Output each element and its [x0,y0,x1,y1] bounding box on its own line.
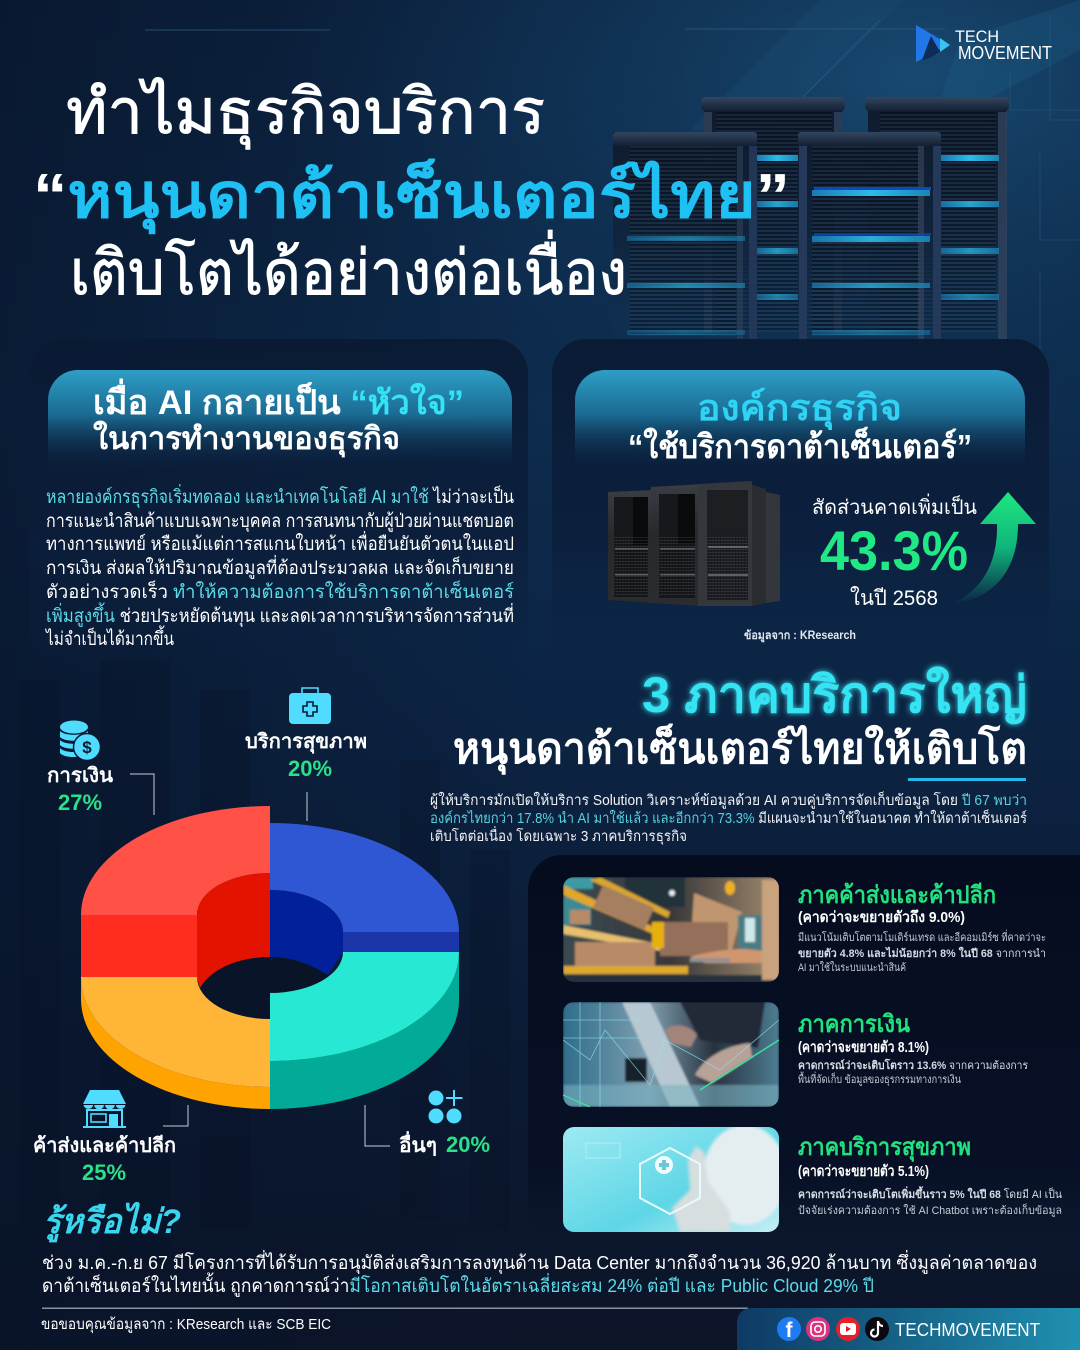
panel header: ในการทำงานของธุรกิจ [93,420,400,458]
photo: hands with financial charts [563,1002,779,1107]
card: healthcare: ภาคบริการสุขภาพ [798,1134,971,1163]
logo: Tech Movement [916,25,1052,63]
stat: 43.3%: ในปี 2568 [850,586,938,610]
donut chart: sector shares [81,806,459,1109]
footer bar: social media: TECHMOVEMENT [895,1320,1040,1340]
body text: ทางการแพทย์ หรือแม้แต่การสแกนใบหน้า เพื่อยืนยันตัวตนในแอป [46,531,514,554]
card: finance: พื้นที่จัดเก็บ ข้อมูลของธุรกรรมทางการเงิน [798,1071,961,1086]
card: healthcare: คาดการณ์ว่าจะเติบโตเพิ่มขึ้นราว 5% ในปี 68 โดยมี AI เป็น [798,1186,1062,1201]
heading: three major sectors: หนุนดาต้าเซ็นเตอร์ไทยให้เติบโต [453,723,1027,775]
segment: hole [198,955,334,1021]
did you know: ดาต้าเซ็นเตอร์ในไทยนั้น ถูกคาดการณ์ว่ามีโอกาสเติบโตในอัตราเฉลี่ยสะสม 24% ต่อปี และ Public Cloud 29% ปี [42,1272,874,1297]
segment: healthcare 20% [270,823,459,975]
panel: three sectors [528,855,1080,1250]
body text: หลายองค์กรธุรกิจเริ่มทดลอง และนำเทคโนโลยี AI มาใช้ ไม่ว่าจะเป็น [46,484,514,509]
card: finance: (คาดว่าจะขยายตัว 8.1%) [798,1039,929,1056]
card: finance: ภาคการเงิน [798,1011,911,1038]
stat: 43.3%: 43.3% [820,519,968,582]
title: เติบโตได้อย่างต่อเนื่อง [70,230,627,308]
icon: coins: $ [82,738,92,757]
body text: ไม่จำเป็นได้มากขึ้น [44,625,174,649]
card: wholesale and retail [563,877,1046,983]
icon: youtube [836,1317,860,1341]
did you know [42,1201,1037,1297]
title: ทำไมธุรกิจบริการ [66,77,545,149]
card: wholesale and retail: AI มาใช้ในระบบแนะนำสินค้ [798,961,906,974]
card: healthcare: (คาดว่าจะขยายตัว 5.1%) [798,1163,929,1180]
body text [44,484,514,649]
photo: shopping cart in warehouse aisle [563,877,780,983]
segment: retail 25% [81,977,270,1109]
label: retail 25% [33,1090,188,1185]
icon: first-aid kit [289,688,331,724]
heading: three major sectors: 3 ภาคบริการใหญ่ [642,666,1027,724]
segment: finance 27% [81,806,270,988]
did you know: ช่วง ม.ค.-ก.ย 67 มีโครงการที่ได้รับการอนุมัติส่งเสริมการลงทุนด้าน Data Center มากถึงจำนวน 36,920 ล้านบาท ซึ่งมูลค่าตลาดของ [42,1250,1037,1275]
panel: AI as the heart of business [30,339,528,669]
logo: Tech Movement: TECH [955,27,999,46]
source note: ข้อมูลจาก : KResearch [744,629,856,643]
label: others 20%: อื่นๆ [399,1130,437,1157]
label: retail 25%: 25% [82,1160,126,1185]
card: wholesale and retail: (คาดว่าจะขยายตัวถึง 9.0%) [798,908,965,926]
label: healthcare 20% [245,688,367,821]
body text: การเงิน ส่งผลให้ปริมาณข้อมูลที่ต้องประมวลผล และจัดเก็บขยาย [46,555,514,579]
segment: others 20% [270,952,459,1109]
card: finance: คาดการณ์ว่าจะเติบโตราว 13.6% จากความต้องการ [798,1058,1028,1072]
stat: 43.3% [812,493,977,610]
body text: เพิ่มสูงขึ้น ช่วยประหยัดต้นทุน และลดเวลาการบริหารจัดการส่วนที่ [46,602,514,628]
did you know: รู้หรือไม่? [43,1201,181,1243]
panel header: องค์กรธุรกิจ [697,387,902,431]
card: wholesale and retail: ภาคค้าส่งและค้าปลีก [798,882,996,909]
card: healthcare [563,1125,1062,1232]
card: finance [563,1002,1028,1107]
icon: tiktok [865,1317,889,1341]
label: finance 27%: 27% [58,790,102,815]
label: healthcare 20%: บริการสุขภาพ [245,731,367,754]
card: healthcare: ปัจจัยเร่งความต้องการ ใช้ AI Chatbot เพราะต้องเก็บข้อมูล [798,1203,1062,1217]
stat: 43.3%: สัดส่วนคาดเพิ่มเป็น [812,493,977,519]
panel header: “ใช้บริการดาต้าเซ็นเตอร์” [628,426,972,465]
panel header [575,370,1025,470]
illustration: server racks [613,97,1009,348]
intro paragraph: ผู้ให้บริการมักเปิดให้บริการ Solution วิเคราะห์ข้อมูลด้วย AI ควบคู่บริการจัดเก็บข้อมูล โดย ปี 67 พบว่า [430,790,1027,809]
panel: organisations using data centres [552,339,1049,669]
intro paragraph: เติบโตต่อเนื่อง โดยเฉพาะ 3 ภาคบริการธุรกิจ [430,826,687,845]
panel header: เมื่อ AI กลายเป็น “หัวใจ” [93,378,464,422]
arrow: upward growth [950,492,1036,604]
panel header [48,370,512,470]
card: wholesale and retail: ขยายตัว 4.8% และไม่น้อยกว่า 8% ในปี 68 จากการนำ [798,946,1046,960]
label: others 20%: 20% [446,1132,490,1157]
label: finance 27% [47,720,154,815]
icon: facebook [777,1317,801,1342]
icon: facebook: f [786,1319,794,1342]
credit: ขอขอบคุณข้อมูลจาก : KResearch และ SCB EIC [41,1316,331,1334]
label: healthcare 20%: 20% [288,756,332,781]
label: retail 25%: ค้าส่งและค้าปลีก [33,1134,176,1157]
title: “หนุนดาต้าเซ็นเตอร์ไทย ” [33,158,790,234]
icon: server racks [608,481,780,606]
logo: Tech Movement: MOVEMENT [958,43,1052,63]
photo: hand touching medical hologram [563,1125,787,1232]
icon: instagram [806,1317,830,1341]
footer bar: social media [737,1308,1080,1350]
intro paragraph [430,790,1027,845]
icon: dots and plus [428,1090,462,1124]
intro paragraph: องค์กรไทยกว่า 17.8% นำ AI มาใช้แล้ว และอีกกว่า 73.3% มีแผนจะนำมาใช้ในอนาคต ทำให้ดาต้าเซ็นเตอร์ [430,808,1027,827]
title [33,77,790,308]
label: finance 27%: การเงิน [47,765,113,787]
icon: storefront [83,1090,126,1128]
body text: การแนะนำสินค้าแบบเฉพาะบุคคล การสนทนากับผู้ป่วยผ่านแชตบอต [46,510,514,533]
heading: three major sectors [453,666,1027,781]
body text: ตัวอย่างรวดเร็ว ทำให้ความต้องการใช้บริการดาต้าเซ็นเตอร์ [46,579,514,602]
label: others 20% [365,1090,490,1157]
